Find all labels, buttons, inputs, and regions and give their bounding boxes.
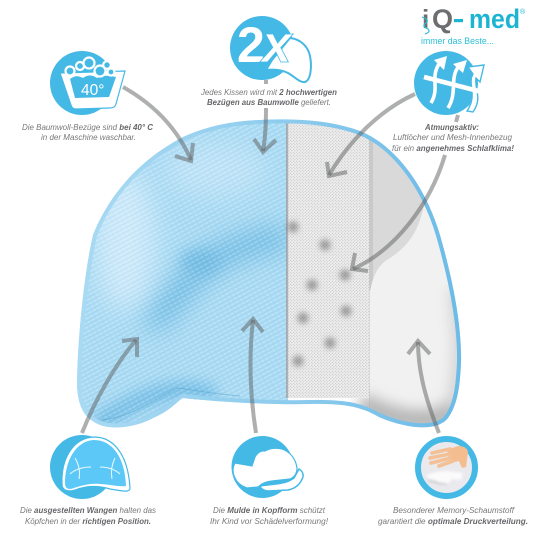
text: head hollow note [210,506,329,526]
cover border [77,119,461,427]
text: cheeks note [20,506,156,526]
text: breathable note: Atmungsaktiv: [424,123,479,132]
text: two covers note: Jedes Kissen wird mit 2 hochwertigen [200,88,337,97]
text: cheeks note: Köpfchen in der richtigen Position. [25,517,151,526]
text: head hollow note: Die Mulde in Kopfform schützt [213,506,326,515]
icon: two covers [230,15,311,82]
icon: cheeks [50,435,130,499]
soap bubbles [66,58,114,76]
gray side panel [369,138,430,404]
logo registered mark: ® [520,8,526,16]
mesh panel [286,120,369,398]
logo [421,4,526,46]
text: head hollow note: Ihr Kind vor Schädelverformung! [210,517,329,526]
head shape [233,448,297,488]
icon: breathable [414,51,484,115]
arrow: head hollow [242,319,263,433]
arrow: breathable holes [352,115,458,271]
temperature: 40° [81,82,104,99]
text: breathable note: für ein angenehmes Schlafklima! [392,144,514,153]
blue cover [70,110,288,440]
arrow: two covers [254,80,276,152]
icon: memory foam [418,439,475,496]
cover weave texture [81,124,288,424]
logo tagline: immer das Beste... [421,36,494,46]
logo dash [454,19,463,22]
text: cheeks note: Die ausgestellten Wangen halten das [20,506,156,515]
icon: head hollow [232,436,303,498]
arrow: cheeks [82,339,137,433]
third arrow outline [467,65,484,112]
text: wash note: Die Baumwoll-Bezüge sind bei 40° C [22,123,153,132]
text: breathable note [392,123,514,153]
cheek arrows [70,458,120,479]
text: memory foam note [378,506,528,526]
text: two covers note: Bezügen aus Baumwolle geliefert. [207,98,331,107]
air holes [288,222,352,366]
logo med: med [469,4,520,34]
text: memory foam note: Besonderer Memory-Schaumstoff [393,506,515,515]
arrow: breathable mesh [327,94,415,176]
label x: x [259,15,294,74]
foam imprint [427,471,463,484]
pillow lip [260,469,303,491]
small pillow outline [266,38,311,82]
arrow: washing to cover [123,87,193,161]
label 2: 2 [237,17,265,73]
logo wordmark: Q [432,4,453,34]
text: two covers note [200,88,337,107]
text: memory foam note: garantiert die optimale Druckverteilung. [378,517,528,526]
hand [430,446,468,468]
air flow arrows [431,64,459,108]
cheek seam [100,388,240,420]
arrow: memory foam [408,341,439,433]
text: wash note: in der Maschine waschbar. [41,133,136,142]
pillow [77,119,462,428]
logo mark i with staff: i [422,4,429,34]
foam shading [360,290,460,420]
text: wash note [22,123,153,142]
cover shading [95,145,290,425]
memory foam core [370,206,457,412]
text: breathable note: Luftlöcher und Mesh-Innenbezug [393,133,513,142]
fabric band [424,77,482,92]
icon: wash 40 degrees [50,51,125,115]
